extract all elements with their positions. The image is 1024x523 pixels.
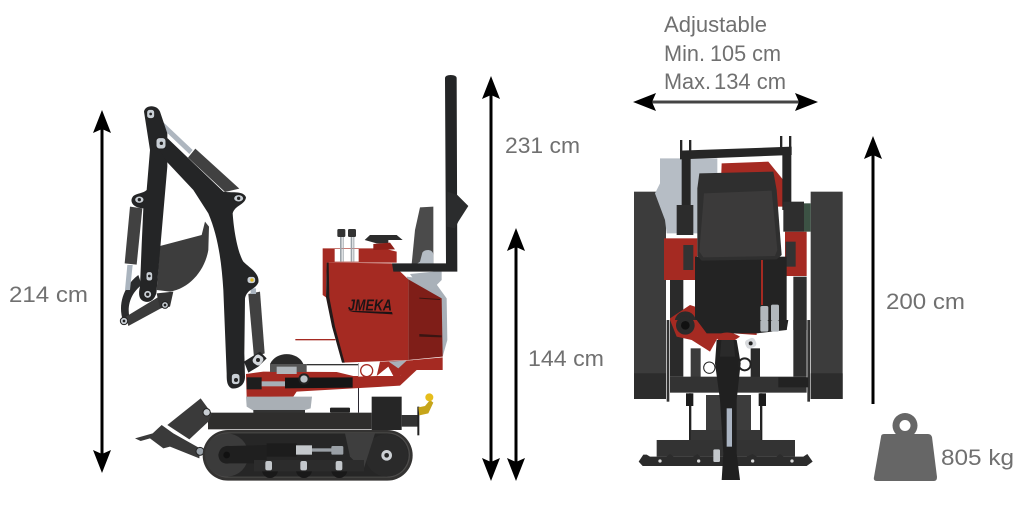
track frame (208, 413, 372, 429)
red rod (295, 339, 335, 340)
bucket (157, 222, 209, 292)
fuel tank (697, 172, 782, 261)
thin tube (358, 363, 359, 413)
tank side (408, 279, 443, 360)
seat pedestal (365, 235, 403, 243)
seat back (412, 207, 433, 264)
drive wheel (365, 434, 408, 477)
tracks lower (634, 320, 666, 399)
roll bar (392, 75, 457, 272)
arrow: adjustable width (633, 93, 818, 111)
boom cylinder rod (161, 122, 193, 154)
dipper arm (131, 106, 167, 302)
slew ring (246, 397, 312, 411)
seat bracket (417, 250, 433, 264)
central boom (715, 340, 741, 480)
arrow: height 214 cm (93, 110, 111, 473)
engine (655, 158, 717, 233)
label: adjustable width (664, 12, 786, 94)
dozer arm upper (167, 398, 212, 439)
chassis red frame (246, 357, 443, 397)
label: adjustable width: Min. (664, 41, 705, 66)
dozer blade (657, 440, 795, 457)
central frame (670, 280, 683, 330)
boom cylinder (188, 149, 239, 192)
track inner (205, 432, 410, 478)
dozer blade (135, 425, 200, 458)
icon: weight (874, 413, 937, 481)
frame uprights (670, 320, 683, 377)
tensioner (218, 445, 267, 464)
tank black edge (326, 263, 345, 363)
boom pin (744, 337, 757, 350)
control levers (340, 237, 354, 262)
label: adjustable width: 105 cm (710, 41, 781, 66)
dark boxes (677, 205, 693, 235)
red wedge (670, 305, 695, 330)
idler wheel (205, 433, 248, 477)
main boom (154, 136, 259, 388)
side view excavator (120, 75, 468, 481)
lower machine (634, 316, 843, 480)
label: 231 cm: 231 cm (505, 133, 580, 158)
seat top plate red (323, 248, 397, 297)
centre body (695, 257, 787, 330)
upper machine (634, 136, 843, 333)
engine side parts (407, 277, 447, 357)
track and dozer blade (135, 398, 413, 481)
label: adjustable width: Max. (664, 69, 711, 94)
logo: JMEKA (348, 298, 392, 315)
tow hitch (418, 400, 433, 415)
label: adjustable width: Adjustable (664, 12, 767, 37)
hydraulic block (285, 377, 353, 388)
arrow: height 144 cm (507, 228, 525, 481)
arrow: height 231 cm (482, 76, 500, 481)
arm link (126, 295, 170, 326)
red tank front (327, 263, 408, 363)
label: adjustable width: 134 cm (714, 69, 786, 94)
label: 144 cm: 144 cm (528, 346, 604, 371)
red wedge lower (670, 320, 757, 352)
red brackets (664, 238, 697, 280)
bucket link arc (121, 275, 142, 322)
machine body (208, 229, 447, 435)
tracks (634, 192, 666, 330)
uprights (682, 155, 691, 215)
label: 200 cm: 200 cm (886, 289, 965, 314)
dozer push frame (706, 395, 751, 443)
roll bar and seat (392, 75, 468, 290)
front view excavator (634, 136, 843, 480)
dipper cylinder (125, 207, 142, 265)
pivot bracket (244, 352, 267, 373)
roll bar bracket (447, 192, 468, 228)
piston (247, 377, 262, 389)
crossbar (670, 377, 807, 393)
yellow pin (250, 278, 254, 282)
excavator arm and bucket (120, 106, 265, 388)
pivot pins (120, 109, 256, 385)
red hood (720, 162, 783, 207)
lower cylinder (248, 292, 265, 357)
blade rams (689, 393, 691, 446)
label: 214 cm: 214 cm (9, 282, 88, 307)
plate (345, 433, 375, 470)
rollers (262, 462, 347, 478)
dipper cylinder rod (125, 265, 133, 290)
arrow: height 200 cm (864, 136, 882, 404)
swing dome (270, 354, 303, 364)
red wire (761, 260, 763, 305)
filters (760, 306, 768, 329)
track outer (203, 430, 413, 481)
label: 805 kg: 805 kg (941, 445, 1014, 470)
